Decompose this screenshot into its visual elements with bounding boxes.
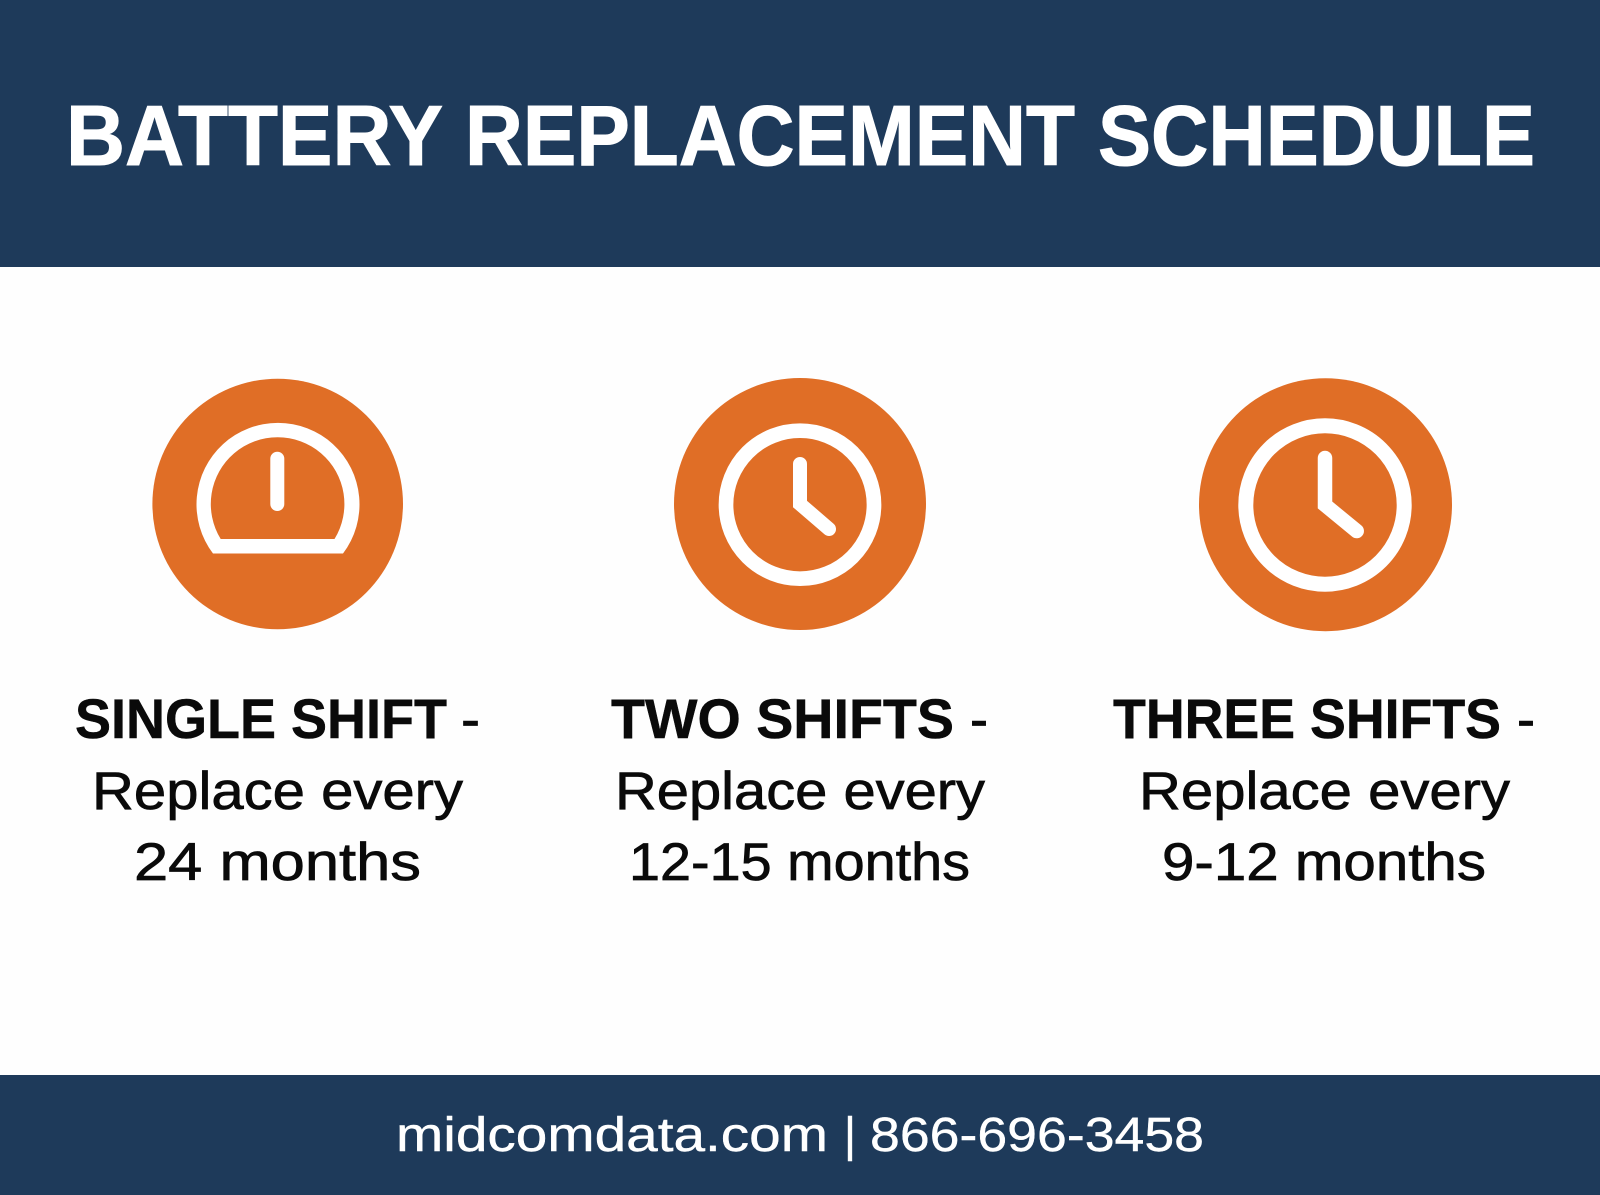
- panel: single shift: [75, 379, 480, 892]
- icon: clock: [674, 378, 926, 630]
- text: three shifts schedule: THREE SHIFTS: [1113, 687, 1501, 750]
- text: single shift schedule: 24 months: [134, 833, 421, 892]
- text: two shifts schedule: Replace every: [615, 762, 986, 821]
- footer contact text: 866-696-3458: [870, 1109, 1204, 1162]
- header band: [0, 0, 1600, 267]
- text: three shifts schedule: 9-12 months: [1162, 833, 1486, 892]
- title: REPLACEMENT: [465, 89, 1075, 184]
- footer contact text: midcomdata.com: [396, 1109, 828, 1162]
- text: three shifts schedule: -: [1517, 687, 1535, 750]
- icon: gauge: [152, 379, 403, 629]
- footer band: [0, 1075, 1600, 1195]
- text: three shifts schedule: Replace every: [1139, 762, 1511, 821]
- footer contact text: |: [844, 1109, 856, 1162]
- title: [66, 89, 1535, 184]
- icon: clock: [1199, 378, 1452, 631]
- text: two shifts schedule: [611, 687, 988, 892]
- title: SCHEDULE: [1098, 89, 1535, 184]
- text: three shifts schedule: [1113, 687, 1535, 892]
- text: single shift schedule: Replace every: [92, 762, 464, 821]
- footer contact text: [396, 1109, 1204, 1162]
- title: BATTERY: [66, 89, 443, 184]
- text: single shift schedule: [75, 687, 480, 892]
- text: two shifts schedule: TWO SHIFTS: [611, 687, 954, 750]
- text: two shifts schedule: 12-15 months: [629, 833, 970, 892]
- panel: two shifts: [611, 378, 988, 892]
- text: two shifts schedule: -: [970, 687, 988, 750]
- text: single shift schedule: -: [461, 687, 480, 750]
- panel: three shifts: [1113, 378, 1535, 892]
- text: single shift schedule: SINGLE SHIFT: [75, 687, 447, 750]
